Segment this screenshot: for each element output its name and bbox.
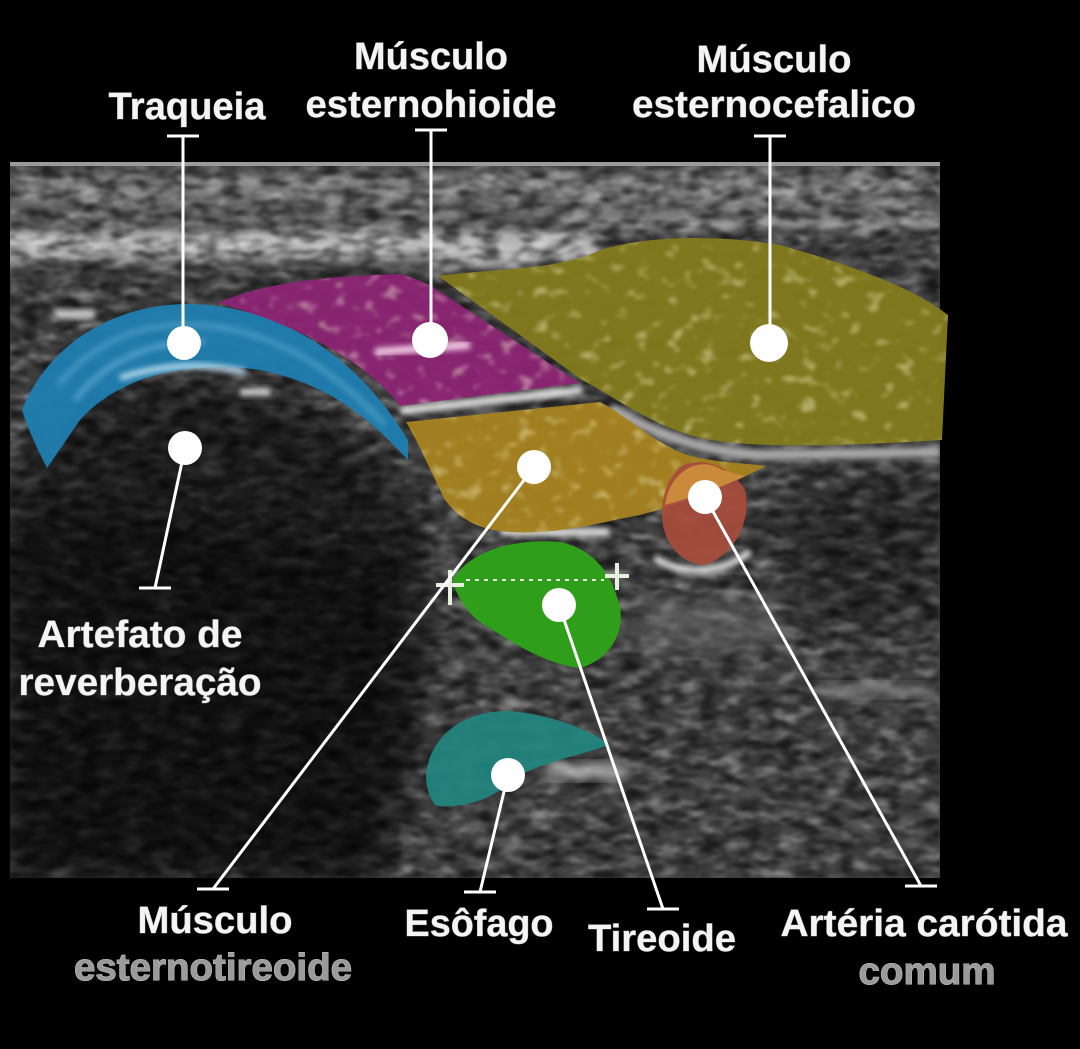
label: Músculo esternocefalico: esternocefalico <box>632 84 916 126</box>
label: Músculo esternotireoide <box>74 900 352 989</box>
ultrasound image <box>0 162 940 878</box>
label: Esôfago: Esôfago <box>404 903 554 945</box>
region: músculo esternocefálico <box>438 238 948 445</box>
pointer: esternocefálico <box>750 136 788 362</box>
pointer: esternohioide <box>412 130 448 358</box>
calipers <box>436 563 629 605</box>
label: Músculo esternohioide: esternohioide <box>306 84 556 126</box>
label: Tireoide: Tireoide <box>588 918 736 960</box>
pointer: tireoide <box>542 588 679 909</box>
texture over muscles <box>238 242 948 532</box>
label: Artéria carótida comum: Artéria carótida <box>780 903 1068 945</box>
label: Músculo esternocefalico: Músculo <box>696 39 852 81</box>
label: Traqueia: Traqueia <box>108 86 266 128</box>
region: tireoide <box>452 541 621 668</box>
label: Artefato de reverberação: Artefato de <box>38 614 242 656</box>
label: Artefato de reverberação: reverberação <box>18 662 262 704</box>
label: Artéria carótida comum: comum <box>858 951 996 993</box>
pointer: esôfago <box>464 758 525 892</box>
region: músculo esternohioide <box>218 274 580 406</box>
pointer: traqueia <box>167 136 201 360</box>
region: sobreposição carótida <box>665 464 745 505</box>
pointer: artefato <box>139 431 202 588</box>
label: Músculo esternohioide <box>306 36 556 126</box>
label: Artefato de reverberação <box>18 614 262 704</box>
label: Músculo esternocefalico <box>632 39 916 126</box>
label: Artéria carótida comum <box>780 903 1068 993</box>
region: músculo esternotireoide <box>406 402 766 532</box>
label: Músculo esternohioide: Músculo <box>354 36 508 78</box>
region: esôfago <box>426 711 610 806</box>
label: Músculo esternotireoide: Músculo <box>138 900 292 942</box>
region: artéria carótida comum <box>662 462 747 565</box>
pointer: esternotireoide <box>197 450 551 889</box>
region: traqueia <box>22 304 408 468</box>
pointer: carótida <box>688 480 937 886</box>
label: Músculo esternotireoide: esternotireoide <box>74 947 352 989</box>
